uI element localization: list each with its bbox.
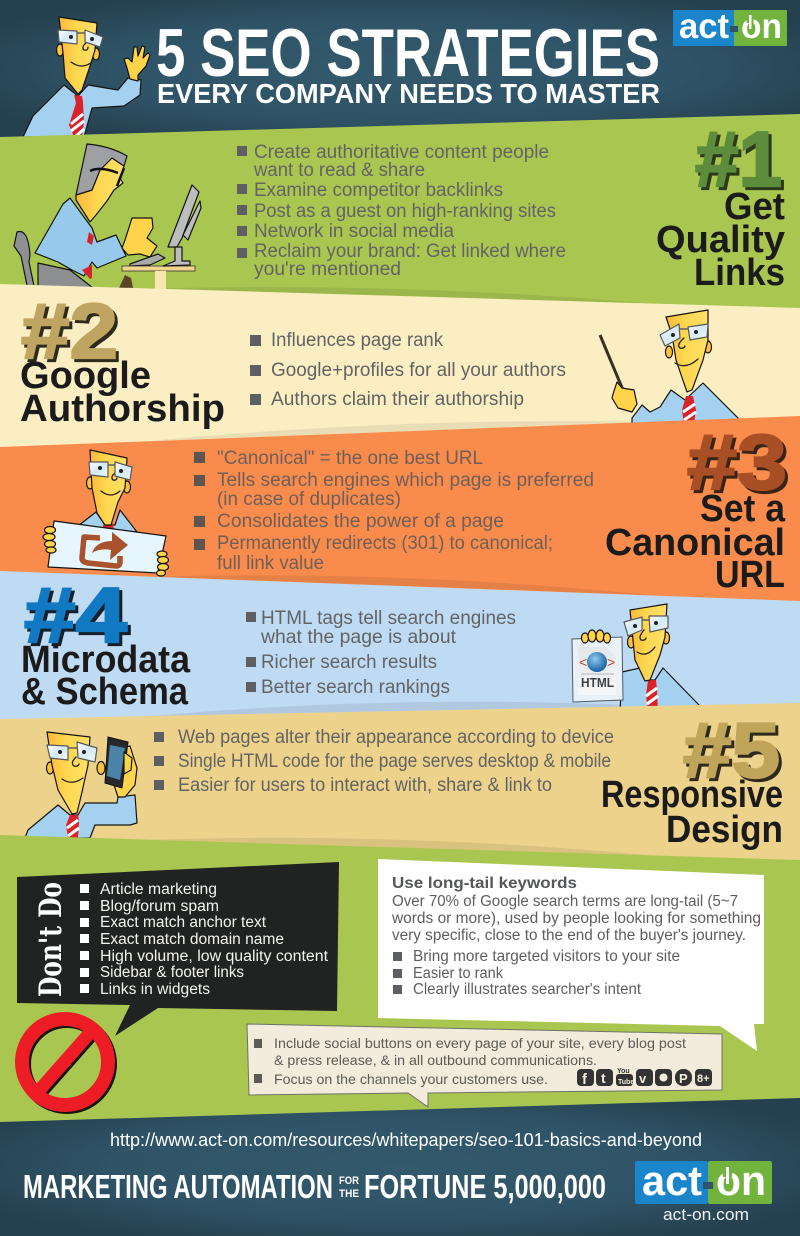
band: lower green bbox=[0, 835, 800, 1130]
list: link tactics: want to read & share bbox=[253, 160, 425, 181]
list: canonical tactics: Consolidates the power of a page bbox=[217, 511, 504, 532]
list: authorship tactics: Authors claim their authorship bbox=[271, 389, 524, 410]
icons: social media: t bbox=[601, 1070, 606, 1086]
list: responsive tactics: Single HTML code for the page serves desktop & mobile bbox=[178, 751, 611, 772]
callout: long-tail keywords: Easier to rank bbox=[413, 965, 503, 982]
character: man holding sign bbox=[43, 450, 168, 576]
icons: social media: v bbox=[639, 1071, 647, 1086]
panel: tips bbox=[0, 835, 800, 1130]
list: canonical tactics: Permanently redirects (301) to canonical; bbox=[217, 533, 553, 554]
callout: long-tail keywords: Use long-tail keywords bbox=[392, 875, 577, 892]
number 2: #2 bbox=[24, 290, 121, 378]
list: microdata tactics: Richer search results bbox=[261, 652, 437, 673]
logo: act-on bbox=[673, 7, 787, 46]
list: microdata tactics: HTML tags tell search engines bbox=[261, 608, 516, 629]
callout: long-tail keywords: words or more), used by people looking for something bbox=[391, 910, 761, 927]
band: blue bbox=[0, 571, 800, 730]
band: tan bbox=[0, 703, 800, 880]
tagline: THE bbox=[339, 1188, 359, 1200]
panel: header bbox=[0, 0, 800, 139]
icon: redirect arrow bbox=[82, 532, 128, 566]
logo: act-on footer bbox=[635, 1157, 772, 1204]
callout: social buttons: Focus on the channels your customers use. bbox=[274, 1071, 548, 1087]
number 4: #4 bbox=[24, 571, 127, 659]
callout: long-tail keywords bbox=[378, 859, 764, 1051]
website: act-on.com bbox=[663, 1205, 749, 1224]
list: link tactics: Reclaim your brand: Get linked where bbox=[254, 241, 566, 262]
icon: HTML file: < bbox=[579, 654, 587, 670]
callout: don't do: Don't Do bbox=[33, 882, 69, 997]
icons: social media: 8+ bbox=[697, 1073, 710, 1085]
panel: strategy 2 bbox=[0, 284, 800, 470]
callout: don't do: Sidebar & footer links bbox=[100, 964, 244, 981]
icons: social media: P bbox=[679, 1071, 688, 1086]
callout: long-tail keywords: Clearly illustrates searcher's intent bbox=[413, 981, 642, 998]
heading: Google Authorship: Authorship bbox=[20, 388, 225, 430]
list: authorship tactics: Google+profiles for all your authors bbox=[271, 360, 566, 381]
heading: Microdata & Schema: Microdata bbox=[21, 639, 191, 681]
subtitle: EVERY COMPANY NEEDS TO MASTER bbox=[157, 78, 660, 109]
character: man with HTML document bbox=[572, 604, 702, 712]
band: cream bbox=[0, 284, 800, 470]
heading: Microdata & Schema bbox=[21, 639, 191, 713]
number 1: #1 bbox=[695, 115, 782, 203]
panel: footer bbox=[0, 1098, 800, 1236]
number 1: #1 bbox=[698, 118, 785, 206]
list: responsive tactics: Easier for users to interact with, share & link to bbox=[178, 775, 552, 796]
heading: Google Authorship bbox=[20, 355, 225, 430]
list: link tactics: Examine competitor backlinks bbox=[254, 180, 503, 201]
icon: holding fingers bbox=[582, 630, 610, 643]
icons: social media: You bbox=[617, 1068, 630, 1075]
list: canonical tactics: Tells search engines which page is preferred bbox=[217, 470, 594, 491]
character: man with phone bbox=[25, 732, 137, 838]
logo: act-on: act bbox=[679, 7, 729, 46]
list: link tactics: Create authoritative content people bbox=[254, 142, 549, 163]
list: link tactics bbox=[237, 142, 566, 280]
icon: smartphone bbox=[105, 737, 137, 797]
icons: social media: Tube bbox=[618, 1079, 634, 1086]
callout: long-tail keywords: very specific, close to the end of the buyer's journey. bbox=[392, 927, 746, 944]
callout: social buttons bbox=[247, 1024, 722, 1107]
heading: Get Quality Links: Quality bbox=[656, 219, 785, 261]
band: orange bbox=[0, 416, 800, 620]
list: microdata tactics: what the page is about bbox=[260, 627, 457, 648]
number 5: #5 bbox=[683, 706, 780, 794]
heading: Set a Canonical URL: Set a bbox=[700, 488, 786, 530]
heading: Set a Canonical URL: URL bbox=[715, 554, 785, 596]
character: man with pointer bbox=[600, 310, 740, 424]
icons: social media: f bbox=[582, 1071, 588, 1088]
list: responsive tactics bbox=[154, 727, 614, 796]
heading: Microdata & Schema: & Schema bbox=[21, 671, 189, 713]
tagline: MARKETING AUTOMATION bbox=[23, 1168, 333, 1205]
callout: long-tail keywords: Bring more targeted visitors to your site bbox=[413, 948, 680, 965]
list: microdata tactics: Better search rankings bbox=[261, 677, 450, 698]
heading: Google Authorship: Google bbox=[20, 355, 151, 397]
callout: long-tail keywords: Over 70% of Google search terms are long-tail (5~7 bbox=[392, 893, 738, 910]
heading: Responsive Design bbox=[601, 774, 783, 851]
heading: Set a Canonical URL: Canonical bbox=[605, 522, 785, 564]
panel: strategy 3 bbox=[0, 416, 800, 620]
panel: strategy 5 bbox=[0, 703, 800, 880]
icon: HTML file: > bbox=[607, 654, 615, 670]
list: canonical tactics: (in case of duplicates) bbox=[217, 489, 401, 510]
callout: don't do: Exact match anchor text bbox=[100, 914, 267, 931]
logo: act-on footer: act bbox=[642, 1157, 702, 1204]
number 3: #3 bbox=[687, 418, 787, 506]
callout: don't do: Links in widgets bbox=[100, 981, 210, 998]
list: canonical tactics: full link value bbox=[217, 553, 324, 574]
panel: strategy 4 bbox=[0, 571, 800, 730]
callout: don't do: Exact match domain name bbox=[100, 931, 284, 948]
callout: social buttons: & press release, & in all outbound communications. bbox=[274, 1052, 597, 1068]
character: man typing at computer bbox=[14, 144, 201, 290]
list: authorship tactics: Influences page rank bbox=[271, 330, 443, 351]
number 4: #4 bbox=[27, 574, 130, 662]
callout: don't do: Article marketing bbox=[100, 881, 217, 898]
icon: HTML file bbox=[572, 637, 623, 702]
list: responsive tactics: Web pages alter their appearance according to device bbox=[178, 727, 614, 748]
character: waving man bbox=[23, 17, 150, 137]
number 2: #2 bbox=[21, 287, 118, 375]
icon: HTML file: HTML bbox=[581, 675, 614, 690]
heading: Get Quality Links: Links bbox=[694, 252, 785, 294]
logo: act-on footer: on bbox=[716, 1157, 766, 1204]
list: link tactics: you're mentioned bbox=[254, 259, 401, 280]
list: link tactics: Post as a guest on high-ranking sites bbox=[254, 201, 556, 222]
list: microdata tactics bbox=[246, 608, 516, 698]
icons: social media bbox=[577, 1068, 712, 1088]
tagline: FORTUNE 5,000,000 bbox=[364, 1168, 606, 1205]
list: authorship tactics bbox=[250, 330, 566, 410]
list: canonical tactics bbox=[194, 448, 594, 574]
logo: act-on: on bbox=[741, 7, 782, 46]
list: link tactics: Network in social media bbox=[254, 221, 454, 242]
number 5: #5 bbox=[686, 709, 783, 797]
tagline: FOR bbox=[339, 1175, 359, 1187]
list: canonical tactics: "Canonical" = the one best URL bbox=[217, 448, 483, 469]
source url: http://www.act-on.com/resources/whitepapers/seo-101-basics-and-beyond bbox=[110, 1130, 702, 1150]
heading: Set a Canonical URL bbox=[605, 488, 786, 596]
heading: Get Quality Links: Get bbox=[724, 186, 785, 228]
heading: Get Quality Links bbox=[656, 186, 785, 294]
callout: social buttons: Include social buttons on every page of your site, every blog post bbox=[274, 1035, 686, 1051]
icon: prohibition sign bbox=[22, 1019, 110, 1107]
footer background bbox=[0, 1098, 800, 1236]
title: 5 SEO STRATEGIES bbox=[156, 15, 660, 91]
band: green bbox=[0, 114, 800, 330]
panel: strategy 1 bbox=[0, 114, 800, 330]
heading: Responsive Design: Design bbox=[666, 809, 783, 851]
number 3: #3 bbox=[690, 421, 790, 509]
callout: don't do: Blog/forum spam bbox=[100, 898, 219, 915]
header background bbox=[0, 0, 800, 139]
callout: don't do: High volume, low quality content bbox=[100, 948, 329, 965]
callout: don't do bbox=[17, 862, 339, 1036]
